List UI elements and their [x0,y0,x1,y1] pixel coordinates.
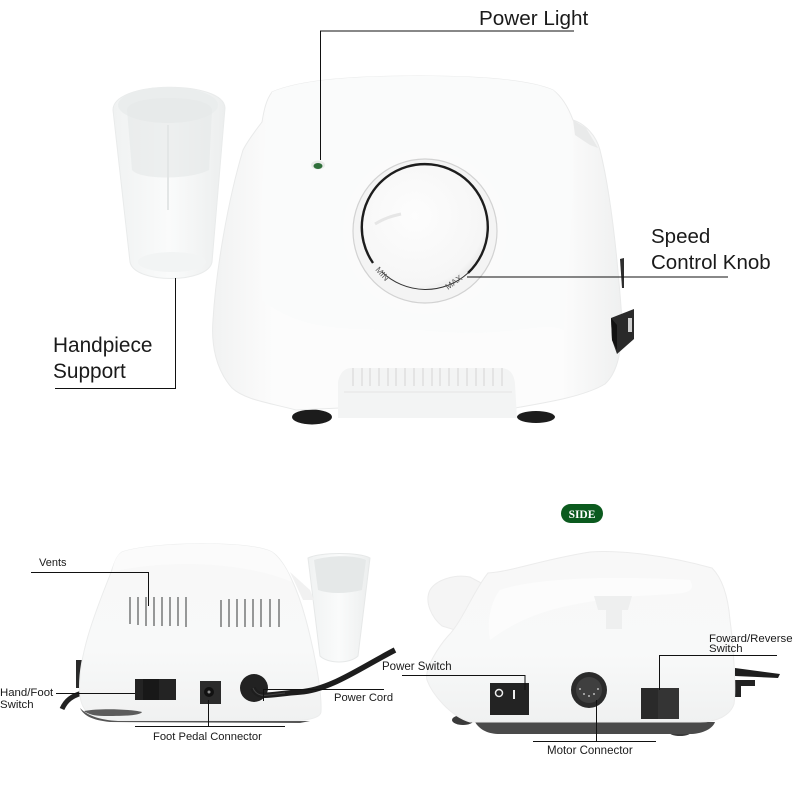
speed control knob [343,150,507,314]
hand/foot switch [135,679,176,700]
right handle notch [573,120,598,148]
label: motor connector: Motor Connector [547,745,633,757]
label: power switch [382,661,525,690]
side rocker switch [611,309,634,354]
handpiece cup [113,87,225,278]
label: forward/reverse switch: Foward/Reverse [709,633,793,645]
feet [292,410,555,424]
right vents [221,599,279,627]
rear cord stubs [735,668,780,697]
device: top view [213,76,634,424]
forward/reverse switch [641,688,679,719]
label: speed control knob: Control Knob [651,251,771,274]
power light [311,160,325,170]
top panel highlight [260,76,574,333]
device: side view [427,552,780,736]
label: foot pedal connector [135,700,285,743]
shell [79,544,321,721]
label: speed control knob: Speed [651,225,710,248]
badge: side [561,504,603,523]
label: speed control knob [467,225,771,277]
label: power light: Power Light [479,7,588,30]
speed control knob: MIN [374,265,391,283]
base [475,722,715,734]
power cord [240,650,395,702]
label: handpiece support: Handpiece [53,334,152,357]
label: power light [320,7,588,160]
label: hand/foot switch [0,687,135,711]
rear cord left [62,693,82,709]
label: power cord [264,690,393,704]
speed control knob: MAX [443,273,464,292]
label: handpiece support: Support [53,360,126,383]
feet [452,715,691,736]
body shell [213,76,622,410]
label: hand/foot switch: Switch [0,699,34,711]
side switch [76,660,83,688]
label: forward/reverse switch [660,633,793,690]
base shadow [80,708,310,723]
label: foot pedal connector: Foot Pedal Connector [153,731,262,743]
label: forward/reverse switch: Switch [709,643,743,655]
label: power switch: Power Switch [382,661,452,673]
label: vents [31,557,148,606]
label: handpiece support [53,278,176,388]
rear switch sliver [620,258,624,288]
knob profile [428,576,485,632]
label: vents: Vents [39,557,67,569]
cup behind [308,554,370,662]
t-slot [594,596,632,629]
motor connector [571,672,607,708]
badge: side: SIDE [569,509,596,521]
left vents [130,597,186,627]
device: rear view [62,544,395,723]
power switch [490,683,529,715]
foot pedal socket [200,681,221,704]
label: motor connector [533,700,656,757]
label: hand/foot switch: Hand/Foot [0,687,54,699]
label: power cord: Power Cord [334,692,393,704]
shell [427,552,735,722]
front vents [338,368,517,418]
